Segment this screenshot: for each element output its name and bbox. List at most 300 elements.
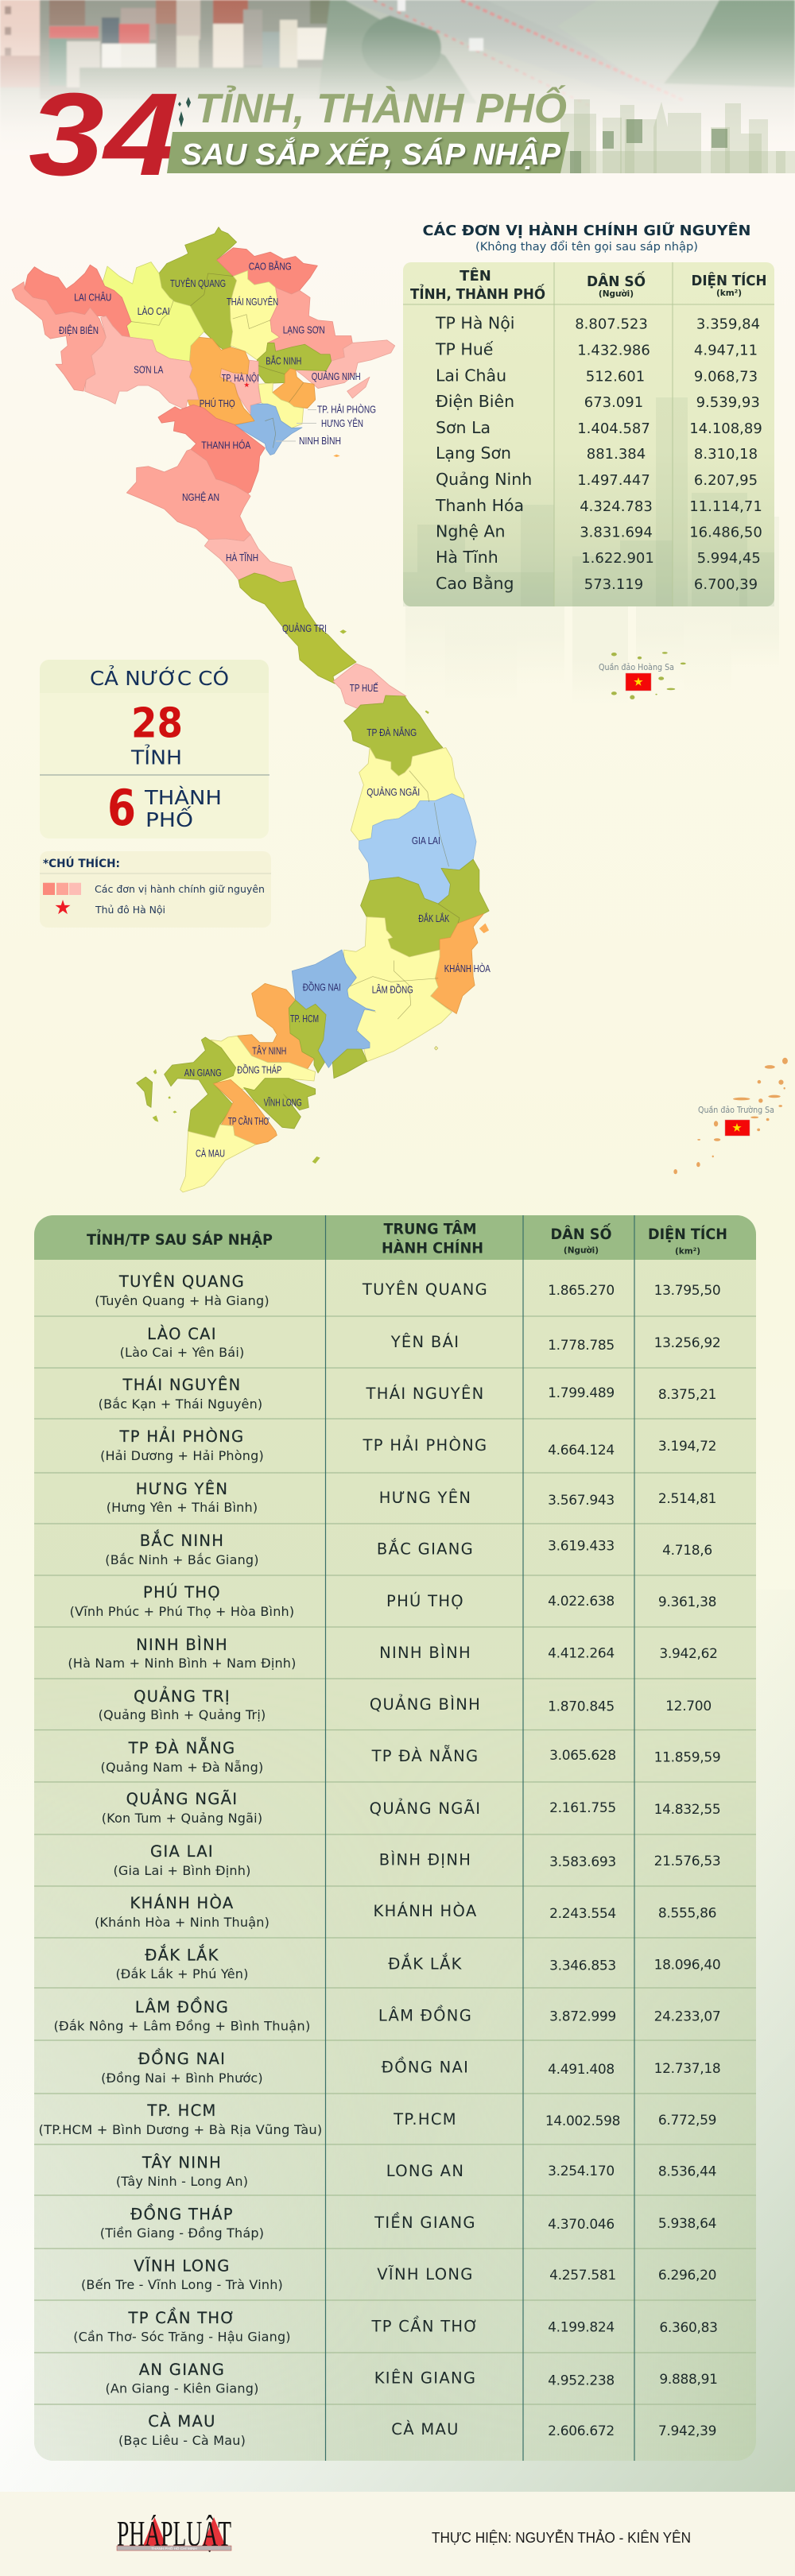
table header — [87, 1220, 727, 1257]
old province borders: central — [348, 771, 460, 1019]
table rows: 1.432.986 — [577, 342, 650, 358]
row: Lào Cai: LÀO CAI — [147, 1325, 217, 1343]
icon: sparkles — [178, 97, 191, 127]
table rows — [435, 314, 762, 593]
Gia Lai — [359, 794, 476, 904]
icon: legend star — [55, 900, 71, 914]
logo strip — [117, 2546, 231, 2551]
islands: Hoàng Sa — [611, 652, 686, 699]
row: Ninh Bình — [68, 1636, 718, 1671]
row: Phú Thọ: 4.022.638 — [548, 1594, 615, 1610]
row: Đắk Lắk: ĐẮK LẮK — [145, 1944, 219, 1965]
row: Tây Ninh: LONG AN — [386, 2162, 464, 2180]
row: Quảng Ngãi — [102, 1788, 720, 1826]
row: An Giang: AN GIANG — [139, 2361, 225, 2379]
table rows: 5.994,45 — [697, 550, 761, 567]
row: Phú Thọ: 9.361,38 — [658, 1594, 716, 1610]
table rows: TP Hà Nội — [435, 314, 514, 333]
subheading: retained units: (Không thay đổi tên gọi sau sáp nhập) — [475, 240, 698, 254]
row: Khánh Hòa — [95, 1893, 716, 1930]
map labels: NGHỆ AN — [182, 491, 219, 503]
Lào Cai — [103, 262, 204, 362]
Đồng Nai — [292, 950, 375, 1067]
header fade overlay — [0, 0, 795, 155]
Tây Ninh — [237, 983, 314, 1069]
Lạng Sơn — [268, 288, 352, 362]
map labels: ĐẮK LẮK — [418, 912, 450, 924]
Hà Tĩnh — [204, 534, 296, 583]
old province borders: north — [131, 273, 304, 448]
map labels: KHÁNH HÒA — [444, 963, 491, 974]
table rows: Lạng Sơn — [436, 444, 511, 463]
map labels: ĐIỆN BIÊN — [59, 324, 99, 336]
row: Tuyên Quang: TUYÊN QUANG — [362, 1280, 488, 1299]
row: Quảng Trị: 1.870.845 — [548, 1699, 615, 1715]
table header: TÊN — [460, 267, 491, 285]
Tuyên Quang — [159, 227, 237, 350]
row: Cà Mau: CÀ MAU — [148, 2412, 216, 2431]
row: Quảng Trị: (Quảng Bình + Quảng Trị) — [99, 1707, 266, 1722]
table rows: 673.091 — [584, 394, 643, 411]
map labels: VĨNH LONG — [264, 1097, 302, 1109]
map labels: HÀ TĨNH — [226, 552, 258, 564]
Khánh Hòa — [431, 914, 484, 1013]
main table: merged provinces — [34, 1215, 756, 2461]
table rows: 3.359,84 — [696, 316, 760, 333]
row: Lào Cai: 13.256,92 — [654, 1335, 720, 1351]
row: Đắk Lắk: 3.346.853 — [549, 1958, 616, 1974]
map labels: ĐỒNG THÁP — [237, 1064, 281, 1076]
table rows: Quảng Ninh — [436, 470, 532, 489]
table rows: 1.622.901 — [581, 550, 654, 567]
row: Phú Thọ: PHÚ THỌ — [386, 1591, 464, 1610]
row: Tuyên Quang: 13.795,50 — [654, 1283, 720, 1299]
row: Tuyên Quang — [95, 1273, 720, 1308]
TP. HCM: Vũng Tàu — [332, 1049, 367, 1079]
row: Phú Thọ: (Vĩnh Phúc + Phú Thọ + Hòa Bình) — [70, 1604, 294, 1619]
map labels: THANH HÓA — [201, 440, 251, 451]
map labels: CÀ MAU — [196, 1148, 225, 1160]
row: Bắc Ninh: BẮC NINH — [140, 1529, 224, 1550]
row: Đồng Tháp: 5.938,64 — [658, 2216, 716, 2232]
row: An Giang: 9.888,91 — [659, 2372, 718, 2388]
row: Thái Nguyên — [99, 1376, 716, 1412]
row: TP. HCM: TP. HCM — [146, 2101, 217, 2120]
TP. HCM — [289, 1000, 326, 1073]
credits: THỰC HIỆN: NGUYỄN THẢO - KIÊN YÊN — [432, 2529, 691, 2546]
row: TP Hải Phòng: TP HẢI PHÒNG — [119, 1426, 244, 1446]
title line 2: SAU SẮP XẾP, SÁP NHẬP — [181, 137, 561, 172]
footer — [0, 2492, 795, 2576]
row: Vĩnh Long: 6.296,20 — [658, 2268, 716, 2284]
legend text: capital: Thủ đô Hà Nội — [95, 905, 165, 916]
table rows: Thanh Hóa — [435, 496, 524, 515]
logo triangles — [143, 2517, 226, 2546]
map of Vietnam: southern provinces — [137, 950, 375, 1192]
Lâm Đồng — [344, 917, 452, 1062]
Ninh Bình — [235, 404, 302, 455]
row: Cà Mau: CÀ MAU — [391, 2420, 460, 2438]
table rows: 4.324.783 — [580, 498, 653, 515]
table header: DÂN SỐ — [550, 1222, 612, 1243]
map labels: QUẢNG NGÃI — [366, 786, 420, 798]
row: Đồng Nai: ĐỒNG NAI — [382, 2055, 469, 2076]
map of Vietnam: central provinces — [333, 664, 489, 1062]
table rows: 9.068,73 — [694, 368, 758, 385]
map labels: SƠN LA — [134, 364, 164, 376]
small islands — [153, 1069, 157, 1075]
map labels: BẮC NINH — [266, 355, 301, 367]
table header: (Người) — [599, 289, 634, 299]
row: Ninh Bình: 4.412.264 — [548, 1645, 615, 1661]
row: Thái Nguyên: (Bắc Kạn + Thái Nguyên) — [99, 1396, 262, 1412]
row: TP Đà Nẵng: (Quảng Nam + Đà Nẵng) — [101, 1760, 263, 1775]
table rows: 1.404.587 — [577, 420, 650, 437]
Quảng Ninh — [296, 340, 395, 389]
Vĩnh Long — [244, 1079, 316, 1129]
table rows: Hà Tĩnh — [436, 548, 498, 567]
row: Đồng Tháp: 4.370.046 — [548, 2217, 615, 2233]
panel background — [40, 660, 269, 839]
row: Đồng Nai: ĐỒNG NAI — [138, 2047, 226, 2068]
map labels: TUYÊN QUANG — [170, 277, 226, 289]
row: Thái Nguyên: THÁI NGUYÊN — [122, 1376, 241, 1394]
row: Gia Lai: 21.576,53 — [654, 1854, 720, 1869]
row: Lào Cai: 1.778.785 — [548, 1338, 615, 1354]
table rows: 1.497.447 — [577, 472, 650, 489]
table rows: 11.114,71 — [689, 498, 762, 515]
row: TP. HCM: 14.002.598 — [545, 2113, 620, 2129]
row: Tây Ninh: (Tây Ninh - Long An) — [116, 2174, 248, 2189]
Đắk Lắk — [361, 859, 489, 957]
row: Khánh Hòa: KHÁNH HÒA — [130, 1893, 234, 1912]
row: Lâm Đồng — [54, 1996, 720, 2033]
row: Lào Cai: YÊN BÁI — [390, 1333, 460, 1351]
row: Quảng Ngãi: 14.832,55 — [654, 1802, 720, 1818]
table header: DIỆN TÍCH — [692, 272, 766, 289]
Khánh Hòa islands — [479, 924, 489, 933]
row: Hưng Yên: HƯNG YÊN — [379, 1489, 471, 1507]
table rows: 9.539,93 — [696, 394, 760, 411]
map labels: CAO BẰNG — [249, 260, 292, 272]
table rows: Điện Biên — [436, 392, 514, 411]
Phú Quốc island — [137, 1077, 153, 1107]
table rows: TP Huế — [435, 339, 494, 358]
row: TP Cần Thơ: 6.360,83 — [659, 2320, 718, 2336]
table header: TỈNH, THÀNH PHỐ — [410, 284, 545, 303]
header skyline silhouette — [556, 99, 795, 173]
Điện Biên — [12, 282, 106, 391]
table header: DIỆN TÍCH — [648, 1224, 727, 1243]
heading: whole country: CẢ NƯỚC CÓ — [90, 665, 229, 690]
legend text: retained units: Các đơn vị hành chính giữ nguyên — [95, 884, 265, 895]
TP Cần Thơ — [213, 1079, 277, 1145]
row: TP Cần Thơ: (Cần Thơ- Sóc Trăng - Hậu Giang) — [73, 2330, 291, 2345]
row: Cà Mau: 2.606.672 — [548, 2423, 615, 2439]
row: Vĩnh Long: 4.257.581 — [549, 2268, 616, 2284]
row: Quảng Trị — [99, 1686, 712, 1722]
TP Hà Nội — [220, 360, 261, 414]
legend swatches — [43, 883, 81, 895]
map of Vietnam: Quảng Trị — [238, 573, 356, 684]
table rows: 6.700,39 — [694, 576, 758, 593]
row: Đồng Nai: 4.491.408 — [548, 2062, 615, 2078]
Cà Mau — [180, 1125, 256, 1192]
panel header band — [40, 660, 269, 693]
map labels: TP. HÀ NỘI — [222, 372, 259, 384]
title — [29, 69, 569, 200]
map labels: HƯNG YÊN — [321, 417, 363, 429]
row: Cà Mau: (Bạc Liêu - Cà Mau) — [118, 2433, 246, 2448]
row: TP Cần Thơ: TP CẦN THƠ — [370, 2316, 479, 2336]
map labels: QUẢNG TRỊ — [282, 622, 327, 634]
row: An Giang: 4.952.238 — [548, 2373, 615, 2389]
map labels: NINH BÌNH — [299, 435, 341, 447]
icon: Hà Nội capital star — [244, 382, 250, 387]
row: Đồng Tháp: ĐỒNG THÁP — [130, 2203, 234, 2224]
row: Bắc Ninh: BẮC GIANG — [377, 1537, 474, 1558]
row: Đồng Tháp — [100, 2203, 716, 2241]
row: TP Cần Thơ — [73, 2307, 718, 2345]
row: Phú Thọ — [70, 1582, 716, 1619]
map labels: AN GIANG — [184, 1067, 222, 1079]
row: Tây Ninh: 3.254.170 — [548, 2163, 615, 2179]
row: Khánh Hòa: (Khánh Hòa + Ninh Thuận) — [95, 1915, 270, 1930]
row: TP Đà Nẵng: 3.065.628 — [549, 1748, 616, 1764]
table rows: Nghệ An — [436, 522, 506, 541]
row: Khánh Hòa: 2.243.554 — [549, 1906, 616, 1922]
row: Gia Lai: GIA LAI — [150, 1842, 214, 1861]
row: Hưng Yên: 2.514,81 — [658, 1491, 716, 1507]
table header: (km²) — [716, 289, 742, 298]
title bar — [167, 132, 569, 173]
row: Tây Ninh — [116, 2154, 716, 2189]
row: TP Đà Nẵng: 11.859,59 — [654, 1750, 720, 1766]
row: TP. HCM — [38, 2101, 716, 2137]
table rows: 14.108,89 — [689, 420, 762, 437]
row: Thái Nguyên: 8.375,21 — [658, 1387, 716, 1403]
header photo: city and river — [0, 0, 795, 151]
row: Gia Lai — [113, 1842, 720, 1878]
row: Lào Cai: (Lào Cai + Yên Bái) — [120, 1345, 244, 1360]
Quảng Ninh islands — [347, 377, 370, 398]
table rows: Sơn La — [436, 418, 491, 437]
An Giang — [165, 1037, 236, 1138]
map labels: LÂM ĐỒNG — [372, 984, 413, 995]
row: Vĩnh Long: VĨNH LONG — [377, 2265, 474, 2284]
row: Quảng Trị: QUẢNG TRỊ — [134, 1686, 231, 1706]
row: TP Hải Phòng — [100, 1426, 716, 1463]
row: Quảng Ngãi: QUẢNG NGÃI — [370, 1798, 481, 1818]
row: TP Cần Thơ: 4.199.824 — [548, 2320, 615, 2336]
table header: TỈNH/TP SAU SÁP NHẬP — [87, 1229, 273, 1249]
map labels: THÁI NGUYÊN — [227, 296, 278, 308]
map labels: QUẢNG NINH — [312, 370, 361, 382]
islands: Trường Sa — [673, 1058, 788, 1174]
Thái Nguyên — [230, 270, 280, 360]
row: An Giang: (An Giang - Kiên Giang) — [105, 2381, 259, 2396]
row: Lào Cai — [120, 1325, 720, 1360]
row: Đồng Nai: (Đồng Nai + Bình Phước) — [101, 2070, 263, 2086]
legend heading: *CHÚ THÍCH: — [43, 856, 120, 870]
row: Tuyên Quang: TUYÊN QUANG — [118, 1273, 245, 1291]
row: TP. HCM: (TP.HCM + Bình Dương + Bà Rịa Vũng Tàu) — [38, 2122, 323, 2137]
table rows: 8.807.523 — [575, 316, 648, 333]
stat: 6 cities: THÀNH — [144, 786, 222, 809]
Bắc Ninh — [257, 343, 332, 383]
row: Đồng Nai: 12.737,18 — [654, 2061, 720, 2077]
row: TP. HCM: 6.772,59 — [658, 2113, 716, 2129]
map labels: TP ĐÀ NẴNG — [366, 726, 417, 738]
map labels: GIA LAI — [412, 835, 440, 846]
row: Quảng Trị: QUẢNG BÌNH — [370, 1694, 481, 1714]
row: Tuyên Quang: 1.865.270 — [548, 1283, 615, 1299]
table rows: 6.207,95 — [694, 472, 758, 489]
skyline behind retained-unit table — [405, 382, 779, 703]
TP Đà Nẵng — [344, 695, 443, 776]
stat: 28 provinces: TỈNH — [130, 745, 182, 769]
flag: Trường Sa — [725, 1120, 750, 1136]
Phú Thọ — [188, 337, 254, 424]
row: Lâm Đồng: 24.233,07 — [654, 2009, 720, 2025]
table rows: Cao Bằng — [436, 574, 514, 593]
row: TP Hải Phòng: 4.664.124 — [548, 1443, 615, 1458]
row: Bắc Ninh: 4.718,6 — [662, 1543, 712, 1559]
table header: (Người) — [564, 1246, 599, 1256]
logo: Pháp Luật — [117, 2513, 231, 2554]
Hưng Yên — [258, 383, 304, 428]
row: Lâm Đồng: (Đắk Nông + Lâm Đồng + Bình Thuận) — [54, 2019, 310, 2033]
row: Hưng Yên: (Hưng Yên + Thái Bình) — [107, 1500, 258, 1515]
row: Hưng Yên: HƯNG YÊN — [136, 1480, 228, 1498]
row: TP Cần Thơ: TP CẦN THƠ — [127, 2307, 235, 2327]
row: Bắc Ninh — [105, 1529, 712, 1567]
stat: 28 provinces: 28 — [131, 700, 183, 748]
row: Quảng Ngãi: QUẢNG NGÃI — [126, 1788, 238, 1808]
row: Lâm Đồng: LÂM ĐỒNG — [378, 2005, 472, 2025]
logo wordmark: PHÁPLUẬT — [117, 2513, 231, 2554]
table header: DÂN SỐ — [587, 271, 646, 290]
row: Tuyên Quang: (Tuyên Quang + Hà Giang) — [95, 1293, 270, 1308]
stat: 6 cities: PHỐ — [145, 806, 193, 831]
row: An Giang: KIÊN GIANG — [374, 2369, 476, 2388]
row: TP Hải Phòng: (Hải Dương + Hải Phòng) — [100, 1448, 264, 1463]
panel: legend — [40, 851, 271, 928]
map labels: TP. HCM — [290, 1013, 319, 1025]
row: TP Đà Nẵng: TP ĐÀ NẴNG — [371, 1745, 479, 1765]
stat: 6 cities — [107, 779, 222, 837]
row: Khánh Hòa: 8.555,86 — [658, 1906, 716, 1922]
row: Quảng Ngãi: (Kon Tum + Quảng Ngãi) — [102, 1811, 262, 1826]
heading: retained units: CÁC ĐƠN VỊ HÀNH CHÍNH GIỮ NGUYÊN — [423, 221, 750, 239]
row: Đồng Nai — [101, 2047, 720, 2086]
map labels: TÂY NINH — [252, 1045, 286, 1057]
row: Cà Mau: 7.942,39 — [658, 2423, 716, 2439]
panel: national totals — [40, 660, 270, 839]
table background — [403, 262, 774, 606]
row: Đồng Tháp: TIỀN GIANG — [374, 2212, 476, 2232]
row: Đắk Lắk: 18.096,40 — [654, 1958, 720, 1974]
row: An Giang — [105, 2361, 718, 2396]
row: Vĩnh Long: (Bến Tre - Vĩnh Long - Trà Vinh) — [81, 2277, 283, 2292]
row: Gia Lai: (Gia Lai + Bình Định) — [113, 1863, 251, 1878]
row: Lâm Đồng: 3.872.999 — [549, 2009, 616, 2025]
table rows: 512.601 — [586, 368, 645, 385]
Trường Sa archipelago — [673, 1058, 788, 1174]
row: Hưng Yên: 3.567.943 — [548, 1493, 615, 1509]
row: Đắk Lắk: (Đắk Lắk + Phú Yên) — [115, 1966, 249, 1981]
table rows: 881.384 — [587, 446, 646, 463]
flag: Hoàng Sa — [626, 673, 651, 691]
row: Khánh Hòa: KHÁNH HÒA — [374, 1901, 477, 1920]
map labels: TP CẦN THƠ — [228, 1115, 270, 1127]
row: Hưng Yên — [107, 1480, 716, 1515]
Cao Bằng — [217, 248, 317, 294]
table skyline — [403, 397, 774, 606]
leader lines — [276, 410, 316, 441]
row: Thái Nguyên: THÁI NGUYÊN — [366, 1385, 484, 1403]
row: Phú Thọ: PHÚ THỌ — [143, 1582, 221, 1602]
row: Quảng Trị: 12.700 — [665, 1699, 712, 1714]
row: Ninh Bình: (Hà Nam + Ninh Bình + Nam Định) — [68, 1656, 297, 1671]
table header: TRUNG TÂM — [383, 1220, 477, 1238]
table rows: 16.486,50 — [689, 525, 762, 541]
table header — [410, 267, 766, 303]
row: Bắc Ninh: 3.619.433 — [548, 1539, 615, 1555]
row: TP Hải Phòng: 3.194,72 — [658, 1439, 716, 1455]
row: TP. HCM: TP.HCM — [393, 2110, 457, 2129]
Thanh Hóa — [158, 405, 265, 494]
Nghệ An — [126, 449, 250, 541]
row: Ninh Bình: 3.942,62 — [659, 1646, 718, 1662]
row: TP Đà Nẵng: TP ĐÀ NẴNG — [128, 1737, 235, 1757]
Đồng Tháp — [211, 1036, 316, 1090]
table grid — [403, 262, 774, 606]
TP Hải Phòng — [273, 369, 316, 409]
row: Quảng Ngãi: 2.161.755 — [549, 1800, 616, 1816]
table rows: 4.947,11 — [694, 342, 758, 358]
row: Vĩnh Long — [81, 2257, 716, 2292]
logo tagline: THÀNH PHỐ HỒ CHÍ MINH — [151, 2546, 197, 2551]
table rows: Lai Châu — [436, 366, 506, 385]
row: Gia Lai: 3.583.693 — [549, 1854, 616, 1870]
panel: retained administrative units — [403, 221, 774, 606]
map labels: ĐỒNG NAI — [303, 982, 341, 994]
map labels: LẠNG SƠN — [283, 323, 325, 335]
title number 34: 34 — [29, 69, 180, 200]
stat: 6 cities: 6 — [107, 779, 136, 837]
row: Tây Ninh: 8.536,44 — [658, 2163, 716, 2179]
map labels — [59, 260, 491, 1160]
row: Ninh Bình: NINH BÌNH — [136, 1636, 228, 1654]
row: TP Hải Phòng: TP HẢI PHÒNG — [363, 1435, 487, 1455]
row: Gia Lai: BÌNH ĐỊNH — [379, 1850, 471, 1869]
label: Trường Sa: Quần đảo Trường Sa — [698, 1106, 774, 1115]
row: Đồng Tháp: (Tiền Giang - Đồng Tháp) — [100, 2225, 264, 2241]
map labels: TP. HẢI PHÒNG — [317, 404, 376, 416]
row: Tây Ninh: TÂY NINH — [142, 2154, 222, 2172]
table header: (km²) — [675, 1247, 700, 1257]
table rows: 3.831.694 — [580, 525, 653, 541]
map labels: LAI CHÂU — [74, 292, 111, 304]
table background — [34, 1215, 756, 2461]
row: TP Đà Nẵng — [101, 1737, 720, 1775]
row: Thái Nguyên: 1.799.489 — [548, 1385, 615, 1401]
row lines — [34, 1316, 756, 2404]
row: Đắk Lắk — [115, 1944, 720, 1981]
label: Hoàng Sa: Quần đảo Hoàng Sa — [599, 663, 674, 672]
map labels: LÀO CAI — [138, 305, 170, 317]
